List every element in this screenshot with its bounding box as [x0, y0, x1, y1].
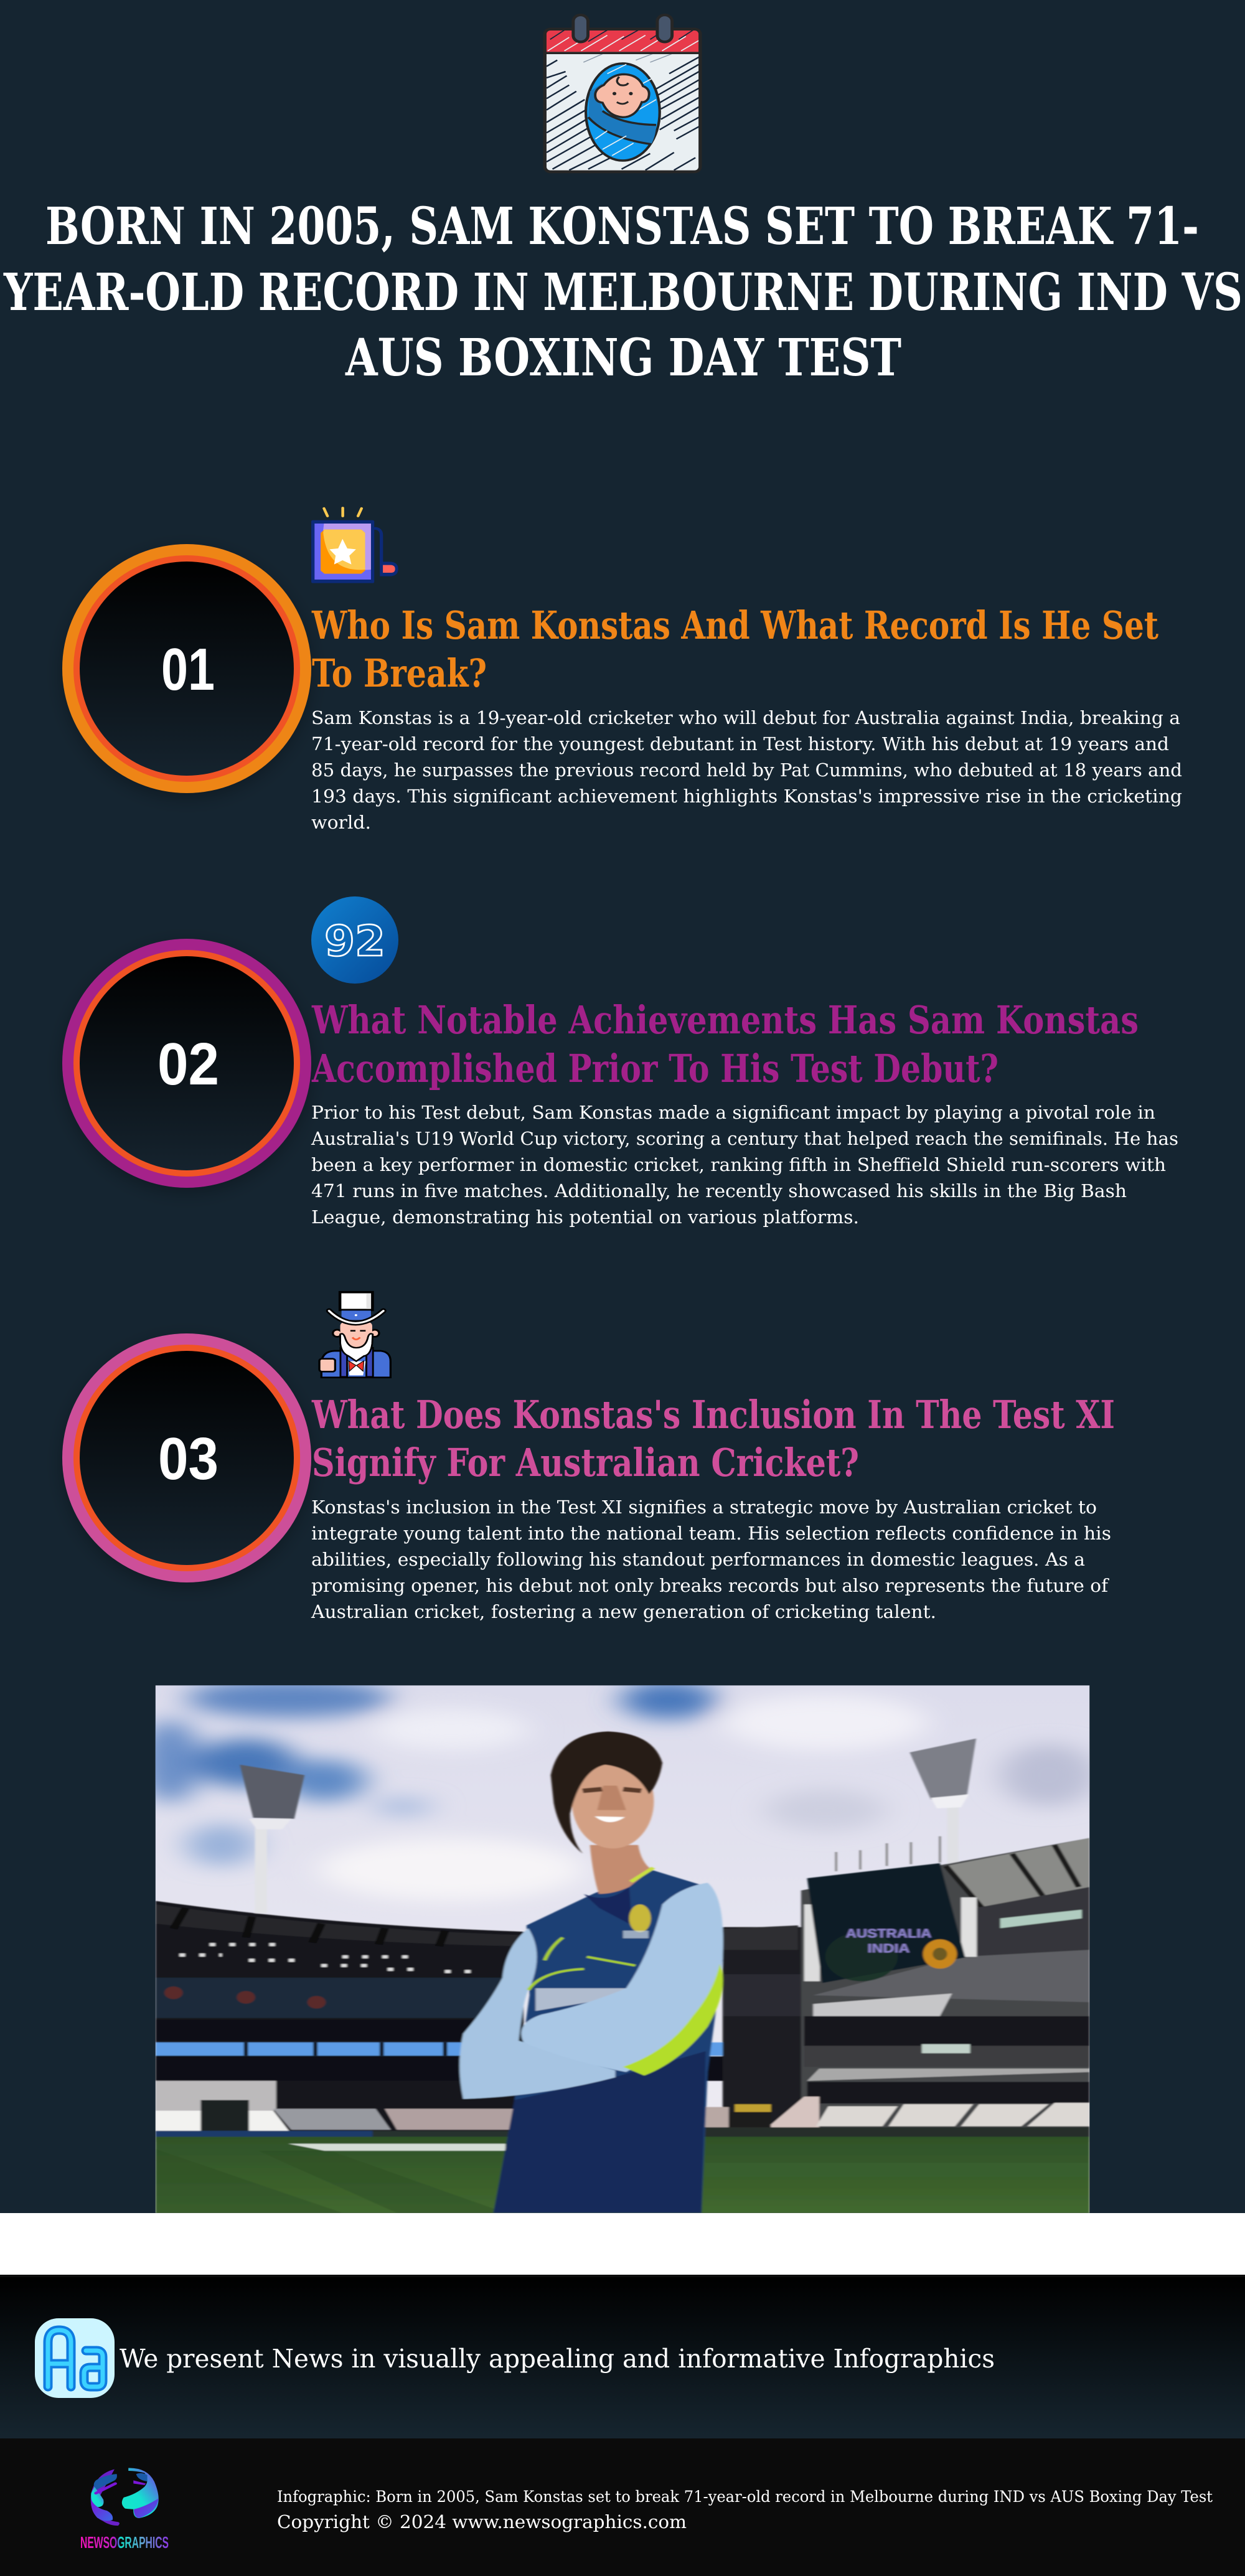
scoreboard: INDIA — [868, 1942, 909, 1956]
lime trim — [623, 1964, 723, 2075]
number badge 02: 02 — [157, 1031, 219, 1098]
panel: section 02 — [62, 896, 1178, 1228]
logo: Newsographics — [80, 2468, 169, 2552]
sky patches — [140, 1679, 1097, 1901]
panel: footer — [0, 2438, 1245, 2576]
stadium blue band — [156, 2042, 794, 2056]
icon: calendar with swaddled baby — [545, 15, 700, 172]
panel: section 01 — [62, 508, 1182, 833]
body text 02: 471 runs in five matches. Additionally, he recently showcased his skills in the Big Bash — [311, 1180, 1127, 1201]
outfield grass — [156, 2136, 1089, 2214]
icon: uncle sam figure — [319, 1292, 390, 1378]
body text 03: Konstas's inclusion in the Test XI signifies a strategic move by Australian cricket to — [311, 1497, 1097, 1518]
right sleeve — [521, 1883, 723, 2072]
body text 02: League, demonstrating his potential on various platforms. — [311, 1206, 859, 1228]
heading 03: Signify For Australian Cricket? — [312, 1440, 859, 1485]
neck — [590, 1845, 652, 1894]
body text 01 — [311, 707, 1182, 833]
jersey — [513, 1870, 723, 2199]
tagline text: We present News in visually appealing and informative Infographics — [120, 2344, 995, 2374]
icon: number 92 badge — [311, 896, 398, 984]
title: AUS BOXING DAY TEST — [345, 328, 901, 388]
icon: mug with star — [311, 508, 398, 583]
left sleeve — [459, 1928, 615, 2099]
body text 03: abilities, especially following his standout performances in domestic leagues. As a — [311, 1549, 1085, 1570]
body text 03 — [311, 1497, 1111, 1622]
panel: section 03 — [62, 1292, 1115, 1622]
icon: number 92 badge: 92 — [324, 917, 385, 966]
photo: Sam Konstas at the MCG — [140, 1679, 1097, 2214]
hair — [551, 1731, 662, 1854]
left stand — [156, 1901, 524, 2142]
body text 02: Australia's U19 World Cup victory, scoring a century that helped reach the semifinals. He has — [311, 1128, 1178, 1149]
body text 01: Sam Konstas is a 19-year-old cricketer who will debut for Australia against India, breaking a — [311, 707, 1180, 728]
dark divider — [0, 2275, 1245, 2277]
heading 01 — [311, 603, 1158, 696]
number badge 02 — [62, 939, 311, 1188]
player — [459, 1731, 723, 2213]
face — [572, 1754, 654, 1848]
stand entrance wall — [156, 2081, 289, 2133]
heading 03 — [311, 1392, 1115, 1485]
panel: tagline band — [0, 2277, 1245, 2438]
body text 03: promising opener, his debut not only breaks records but also represents the future of — [311, 1575, 1109, 1596]
number badge 01: 01 — [161, 636, 215, 703]
right stand — [723, 1927, 807, 2140]
body text 01: world. — [311, 812, 371, 833]
crest — [629, 1904, 651, 1932]
right floodlight — [909, 1739, 976, 1866]
body text 02 — [311, 1102, 1178, 1228]
number badge 01 — [62, 544, 311, 793]
title — [3, 197, 1243, 388]
body text 01: 193 days. This significant achievement highlights Konstas's impressive rise in the cricketing — [311, 786, 1182, 807]
body text 01: 85 days, he surpasses the previous record held by Pat Cummins, who debuted at 18 years and — [311, 759, 1182, 781]
scoreboard — [807, 1863, 965, 1983]
heading 02: Accomplished Prior To His Test Debut? — [311, 1046, 998, 1091]
left floodlight — [240, 1765, 304, 1913]
heading 02 — [311, 997, 1139, 1091]
icon: Aa font tile — [35, 2318, 115, 2398]
body text 02: been a key performer in domestic cricket, ranking fifth in Sheffield Shield run-scorers with — [311, 1154, 1166, 1175]
heading 01: To Break? — [312, 651, 487, 696]
copyright line: Copyright © 2024 www.newsographics.com — [277, 2511, 687, 2532]
body text 01: 71-year-old record for the youngest debutant in Test history. With his debut at 19 years and — [311, 733, 1169, 754]
scoreboard: AUSTRALIA — [846, 1927, 931, 1940]
roof slats — [946, 1838, 1089, 1908]
number badge 03: 03 — [158, 1426, 218, 1492]
body text 03: Australian cricket, fostering a new generation of cricketing talent. — [311, 1601, 936, 1622]
footer credit line: Infographic: Born in 2005, Sam Konstas set to break 71-year-old record in Melbourne during IND vs AUS Boxing Day Test — [277, 2488, 1213, 2506]
logo: Newsographics: NEWSOGRAPHICS — [80, 2533, 169, 2552]
white strip — [0, 2213, 1245, 2275]
body text 03: integrate young talent into the national team. His selection reflects confidence in his — [311, 1523, 1111, 1544]
body text 02: Prior to his Test debut, Sam Konstas made a significant impact by playing a pivotal role in — [311, 1102, 1155, 1123]
number badge 03 — [62, 1333, 311, 1582]
